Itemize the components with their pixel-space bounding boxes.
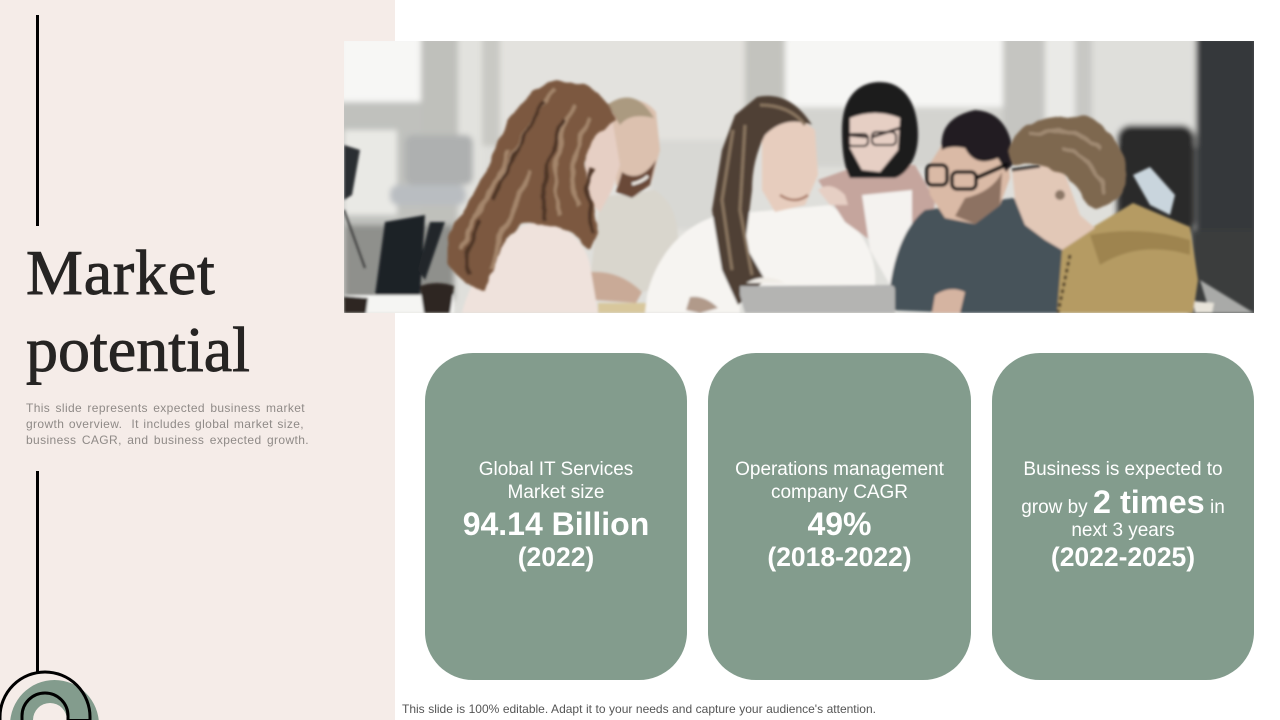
panel: operations management CAGR: company CAGR — [771, 482, 908, 503]
stat: growth multiple: grow by 2 times in — [1021, 484, 1225, 520]
man with black glasses — [888, 198, 1067, 313]
title: potential — [26, 314, 250, 385]
laptop — [740, 285, 895, 313]
footer note: This slide is 100% editable. Adapt it to your needs and capture your audience's attention. — [402, 702, 876, 716]
description text: This slide represents expected business market — [26, 401, 305, 415]
panel: expected business growth: Business is expected to — [1023, 459, 1223, 480]
panel: operations management CAGR: Operations management — [735, 459, 944, 480]
panel: expected business growth: (2022-2025) — [1051, 542, 1195, 572]
panel: expected business growth: next 3 years — [1071, 520, 1175, 541]
short wavy hair — [1007, 115, 1127, 207]
icon: decorative arches — [0, 670, 99, 720]
panel: expected business growth — [992, 353, 1254, 680]
title — [26, 237, 250, 385]
title: Market — [26, 237, 216, 308]
top vertical line — [36, 15, 39, 226]
description text: business CAGR, and business expected growth. — [26, 433, 309, 447]
panel: global IT services market size: Global IT Services — [479, 459, 633, 480]
photo: team around a laptop — [344, 41, 1254, 313]
description text: growth overview. It includes global market size, — [26, 417, 304, 431]
curly woman body and face — [462, 223, 598, 313]
stat: market size value: 94.14 Billion — [463, 506, 649, 542]
panel: operations management CAGR: (2018-2022) — [767, 542, 912, 572]
bottom vertical line — [36, 471, 39, 672]
description text — [26, 401, 309, 447]
man with beard — [590, 190, 678, 300]
panel: left sidebar background — [0, 0, 395, 720]
panel: global IT services market size: Market size — [508, 482, 604, 503]
panel: operations management CAGR — [708, 353, 971, 680]
curly hair — [447, 81, 615, 290]
dreadlock woman — [645, 205, 875, 313]
stat: CAGR value: 49% — [808, 506, 872, 542]
panel: global IT services market size — [425, 353, 687, 680]
woman with bob and glasses — [818, 165, 935, 290]
panel: global IT services market size: (2022) — [518, 542, 594, 572]
woman with hoodie — [1057, 203, 1198, 313]
